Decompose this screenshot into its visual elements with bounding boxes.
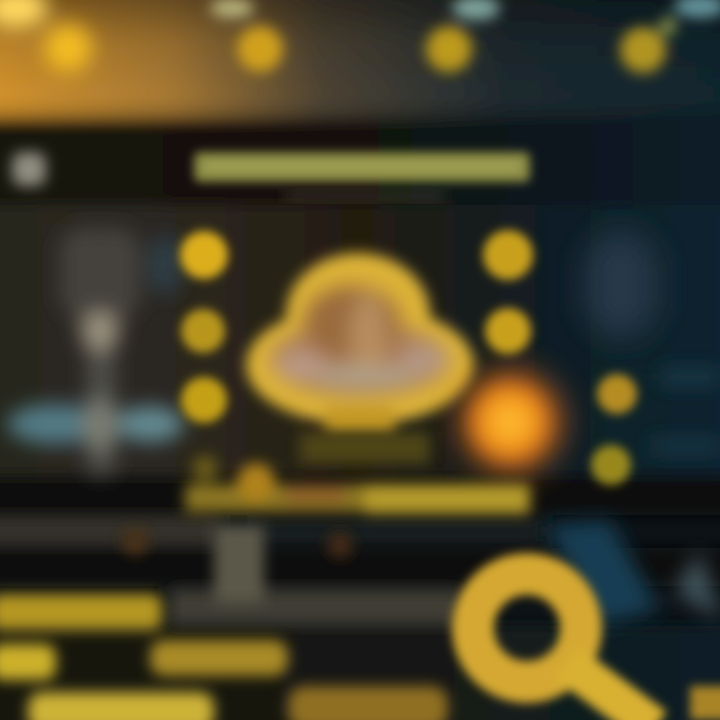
icon: top glow 4 [620,0,720,73]
cloud outer glow [246,253,474,435]
orange glowing orb [460,370,564,474]
bar 2 [0,644,56,680]
lower yellow strip under cloud [185,432,530,514]
data lines [650,370,720,452]
bottom-left yellow bars [0,594,448,720]
icon: far right circle 1 [597,374,637,414]
icon: header badge [12,152,46,186]
bar 5 [288,686,448,720]
icon: left circle 2 [181,309,225,353]
cloud inner [270,286,450,396]
icon: top glow 2 [210,0,283,72]
bar 3 [150,640,288,676]
right panel: shield shape and circles [585,232,720,485]
bar 1 [0,594,162,630]
icon: right circle 2 [485,308,531,354]
right lower dark-blue shapes [545,520,720,625]
icon: top glow 3 [426,0,500,72]
icon: right circle 1 [483,230,533,280]
icon: large golden key [473,574,720,720]
subtitle (illegible in the reference) [285,192,445,200]
header bar [12,152,530,200]
central cloud icon [246,253,474,435]
title (illegible in the reference) [194,152,530,182]
icon: far right circle 2 [591,445,631,485]
right column of yellow circles [483,230,533,354]
icon: left circle 3 [181,377,227,423]
bar 4 [28,692,214,720]
icon: shield [585,232,657,337]
icon: left circle 1 [180,231,228,279]
left panel: satellite figure [7,228,184,475]
icon: top glow 1 [0,0,92,72]
stand pillar and small nodes [122,525,353,603]
left column of yellow circles [180,231,228,423]
top row: glowing light sources and yellow circles [0,0,720,73]
